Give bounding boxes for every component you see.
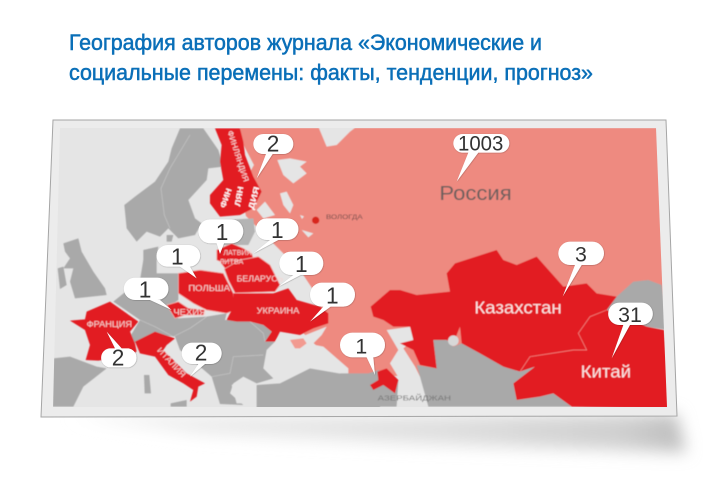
country labels: Europe bbox=[87, 130, 300, 379]
Central Europe, Iberia and islands bbox=[53, 257, 240, 407]
callout: Russia 1003 bbox=[453, 132, 509, 182]
China bbox=[513, 310, 670, 408]
callout: Italy 2 bbox=[182, 340, 222, 377]
Estonia bbox=[220, 218, 255, 245]
land: Central Asia, Caucasus, Mongolia bbox=[340, 250, 670, 408]
callout: Poland 1 bbox=[156, 244, 200, 278]
Poland bbox=[178, 270, 235, 313]
callout: France 2: 2 bbox=[112, 345, 124, 371]
country labels: Europe: ЛЯН bbox=[233, 185, 245, 207]
title: География авторов журнала «Экономические и bbox=[69, 30, 542, 55]
map card bbox=[41, 120, 677, 417]
callout: Latvia/Lithuania 1 bbox=[198, 219, 243, 254]
country labels: Asia: АЗЕРБАЙДЖАН bbox=[378, 394, 451, 403]
country labels: Europe: ФИНЛЯНДИЯ bbox=[225, 130, 251, 183]
callout: Poland 1: 1 bbox=[171, 244, 184, 270]
callout: Czechia 1: 1 bbox=[139, 276, 151, 302]
callout: France 2 bbox=[101, 332, 137, 371]
Scandinavia and British Isles bbox=[58, 128, 223, 298]
Latvia, Lithuania, Belarus bbox=[217, 243, 280, 293]
Ukraine bbox=[227, 288, 328, 342]
city marker: Vologda bbox=[312, 214, 363, 224]
title bbox=[69, 30, 593, 85]
country labels: Europe: ИТАЛИЯ bbox=[155, 345, 188, 379]
country labels: Europe: ФРАНЦИЯ bbox=[87, 319, 132, 329]
city marker: Vologda: ВОЛОГДА bbox=[326, 214, 363, 221]
Finland bbox=[210, 128, 262, 217]
country labels: Europe: ФИН bbox=[218, 187, 234, 209]
country labels: Asia: Китай bbox=[581, 362, 631, 382]
callout: Finland 2: 2 bbox=[267, 131, 279, 157]
country labels: Asia: Казахстан bbox=[474, 297, 562, 317]
map bbox=[40, 120, 680, 415]
callout: Azerbaijan 1 bbox=[340, 333, 385, 375]
callout: Czechia 1 bbox=[124, 276, 172, 310]
callouts: Europe bbox=[101, 131, 355, 377]
country labels: Europe: ЧЕХИЯ bbox=[173, 307, 206, 317]
callout: Russia 1003: 1003 bbox=[458, 132, 503, 156]
title: социальные перемены: факты, тенденции, прогноз» bbox=[69, 60, 593, 85]
callout: Latvia 1 bbox=[253, 217, 298, 253]
country labels: Europe: ДИЯ bbox=[247, 185, 261, 211]
country labels: Europe: ПОЛЬША bbox=[188, 283, 230, 293]
France, Italy, Czechia bbox=[70, 302, 205, 402]
country labels: Europe: ЛАТВИЯ bbox=[223, 250, 252, 257]
callout: Kazakhstan 3 bbox=[558, 242, 604, 297]
callout: Belarus 1 bbox=[278, 251, 323, 287]
callout: Belarus 1: 1 bbox=[295, 251, 308, 277]
land: Russia bbox=[240, 128, 665, 380]
callout: China 31 bbox=[608, 303, 653, 358]
callout: China 31: 31 bbox=[618, 303, 642, 327]
callout: Ukraine 1 bbox=[310, 282, 355, 322]
country labels: Asia: Россия bbox=[439, 182, 512, 205]
country labels: Europe: ЛИТВА bbox=[219, 259, 244, 266]
callouts: Asia bbox=[340, 132, 653, 375]
callout: Kazakhstan 3: 3 bbox=[575, 242, 587, 266]
country labels: Asia bbox=[378, 182, 631, 403]
country labels: Europe: БЕЛАРУСЬ bbox=[237, 274, 284, 284]
callout: Latvia 1: 1 bbox=[271, 217, 284, 243]
callout: Azerbaijan 1: 1 bbox=[355, 334, 367, 358]
Black Sea, Crimea, Balkans and Turkey bbox=[200, 320, 380, 408]
Kazakhstan bbox=[371, 250, 617, 372]
callout: Finland 2 bbox=[253, 131, 293, 178]
country labels: Europe: УКРАИНА bbox=[257, 305, 300, 315]
callout: Latvia/Lithuania 1: 1 bbox=[216, 219, 228, 245]
callout: Ukraine 1: 1 bbox=[326, 282, 339, 308]
seas and lakes in northwest Russia bbox=[257, 127, 357, 237]
Azerbaijan bbox=[370, 368, 398, 393]
card shadow bbox=[70, 414, 686, 452]
callout: Italy 2: 2 bbox=[195, 340, 207, 366]
